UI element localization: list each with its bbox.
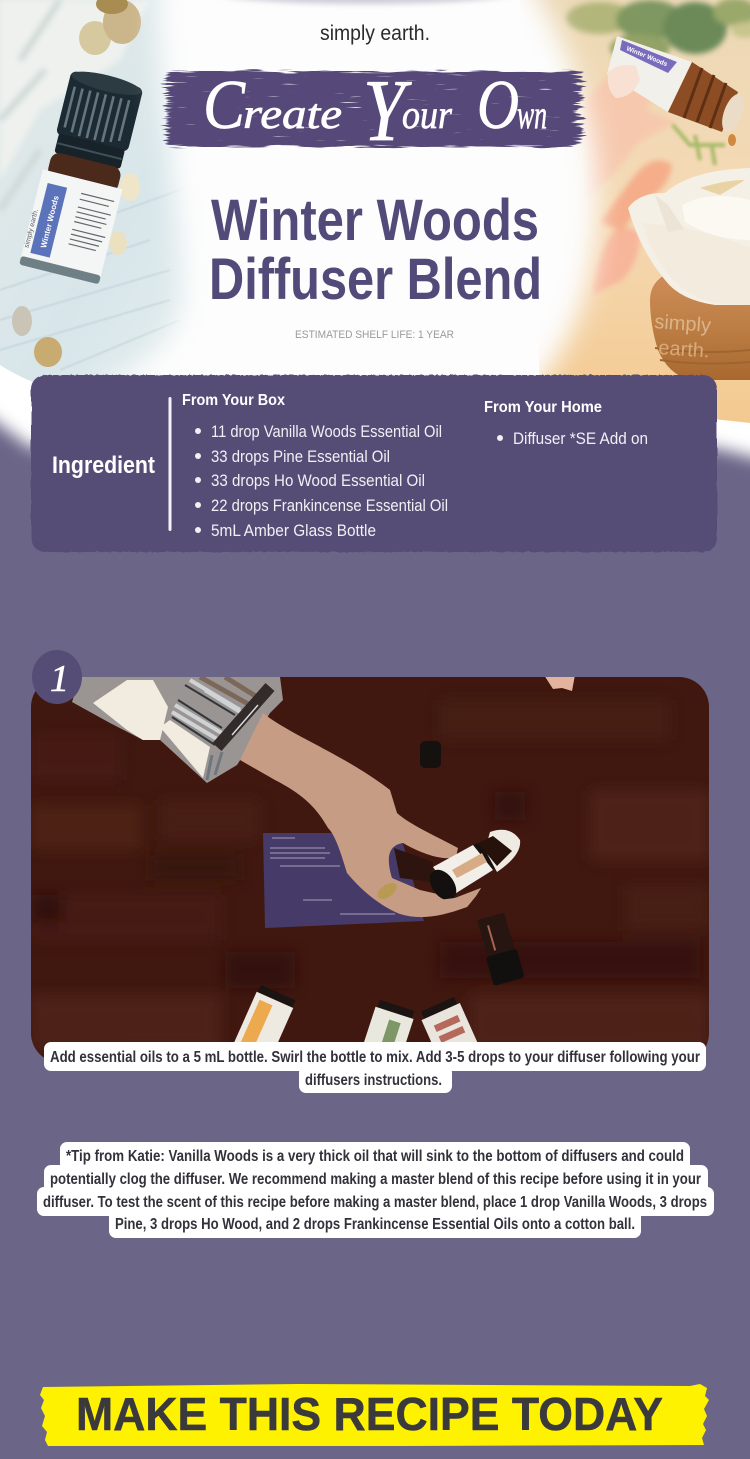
photo: right diffuser and dropper (520, 0, 750, 423)
script heading: O (477, 67, 519, 144)
divider (168, 397, 172, 531)
script heading: C (203, 67, 246, 144)
shirt sleeve (72, 677, 283, 783)
badge: step number 1 (32, 650, 82, 704)
list: from your box: From Your Box (182, 392, 285, 409)
callout: tip from Katie (37, 1142, 714, 1238)
wood planks (33, 792, 708, 1046)
small black cap (420, 741, 441, 768)
caption: step 1 instructions: diffusers instructions. (305, 1072, 442, 1089)
badge: step number 1: 1 (50, 658, 69, 700)
white header base (0, 0, 750, 462)
icon: white flower (628, 168, 750, 305)
list: from your box: 33 drops Ho Wood Essential Oil (211, 472, 425, 490)
caption: step 1 instructions (44, 1042, 706, 1093)
callout: tip from Katie: Pine, 3 drops Ho Wood, and 2 drops Frankincense Essential Oils onto a cotton ball. (115, 1216, 635, 1233)
list: from your home (484, 399, 648, 448)
title: Winter Woods (211, 188, 539, 253)
icon: wooden diffuser pot (650, 272, 750, 380)
thumb nail (608, 65, 640, 98)
icon: frankincense resin (12, 0, 141, 367)
list: from your box: 33 drops Pine Essential Oil (211, 448, 390, 466)
list: from your home: Diffuser *SE Add on (513, 430, 648, 448)
shelf life note: ESTIMATED SHELF LIFE: 1 YEAR (295, 329, 454, 341)
icon: essential oil bottle (19, 66, 148, 284)
panel background (31, 375, 717, 552)
title: Diffuser Blend (209, 247, 542, 312)
list: from your home: From Your Home (484, 399, 602, 416)
icon: essential oil bottle: simply earth. (24, 208, 40, 249)
arm and hand (240, 713, 481, 917)
fingers at top edge (545, 677, 575, 691)
list: from your box: 11 drop Vanilla Woods Essential Oil (211, 423, 442, 441)
white centre glow (80, 0, 597, 395)
call to action: MAKE THIS RECIPE TODAY (76, 1388, 663, 1440)
banner: Create Your Own (163, 63, 584, 160)
icon: dropper bottle: Winter Woods (625, 45, 669, 68)
bottle in hand (430, 830, 520, 900)
step 1 photo (31, 675, 709, 1068)
icon: hand (585, 70, 676, 200)
script heading: Y (363, 63, 412, 160)
icon: dropper bottle (607, 36, 748, 146)
list: from your box (182, 392, 448, 540)
script heading: wn (517, 92, 547, 137)
logo: simply earth: simply earth. (320, 22, 430, 45)
photo: left bottle on white cloth (0, 0, 240, 385)
script heading: reate (243, 92, 342, 138)
icon: essential oil bottle: Winter Woods (39, 194, 61, 249)
panel: ingredients (31, 375, 717, 552)
bottles at bottom (234, 985, 478, 1042)
heading: Ingredient: Ingredient (52, 452, 155, 479)
brush stroke (163, 70, 584, 148)
capped bottle (475, 912, 525, 986)
photo: right diffuser and dropper: simply (654, 311, 712, 337)
icon: green leaves (566, 0, 750, 62)
gold ring (377, 883, 397, 899)
fingers (592, 225, 640, 295)
photo: right diffuser and dropper: earth. (658, 337, 710, 363)
script heading: our (402, 92, 452, 137)
list: from your box: 5mL Amber Glass Bottle (211, 522, 376, 540)
recipe card (263, 833, 424, 928)
list: from your box: 22 drops Frankincense Essential Oil (211, 497, 448, 515)
title (209, 188, 542, 312)
top shadow arc (215, 0, 515, 4)
fingertip over bottle (443, 888, 481, 908)
